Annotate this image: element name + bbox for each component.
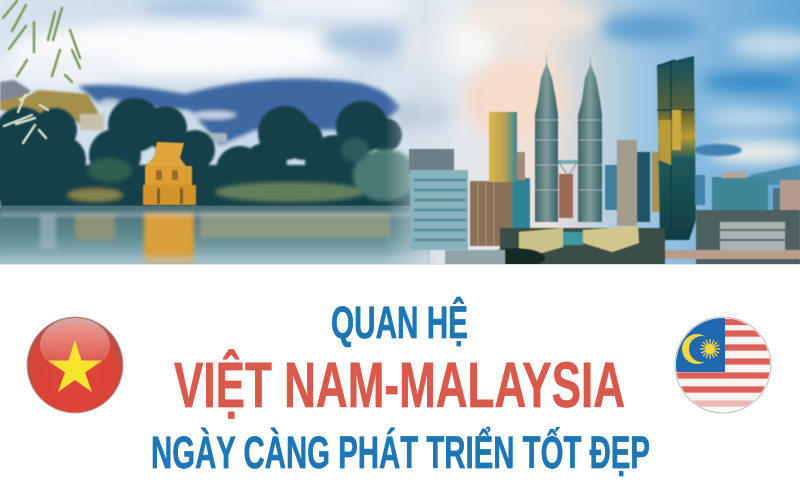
- right-hand towers: [605, 56, 705, 240]
- mist over the trees where the cities blend: [388, 0, 450, 264]
- continuous sky: [0, 0, 800, 265]
- Turtle Tower: [143, 142, 196, 205]
- clouds: [0, 0, 800, 164]
- title line 1: QUAN HỆ: [331, 297, 468, 348]
- distant hills and skyline: [660, 165, 800, 265]
- Petronas Twin Towers: [535, 50, 602, 222]
- banner photo: Hanoi and Kuala Lumpur skyline: [0, 0, 800, 268]
- mid-rise buildings: [470, 112, 530, 246]
- shopping podium and park: [445, 226, 665, 268]
- title: [151, 297, 650, 478]
- dark blue cloud band: [78, 79, 400, 145]
- lit foliage along the shore: [67, 138, 417, 202]
- willow branches: [3, 1, 80, 143]
- icon: Vietnam flag button: [27, 317, 123, 413]
- hotel buildings behind the trees: [0, 80, 227, 143]
- bottom edge of photo: [0, 264, 800, 265]
- dark cloud on the Kuala Lumpur side: [694, 144, 742, 156]
- glass building on the left: [409, 149, 468, 250]
- icon: Malaysia flag button: [675, 317, 771, 413]
- lake with reflections: [0, 207, 430, 265]
- trees around Hoan Kiem lake: [0, 98, 415, 207]
